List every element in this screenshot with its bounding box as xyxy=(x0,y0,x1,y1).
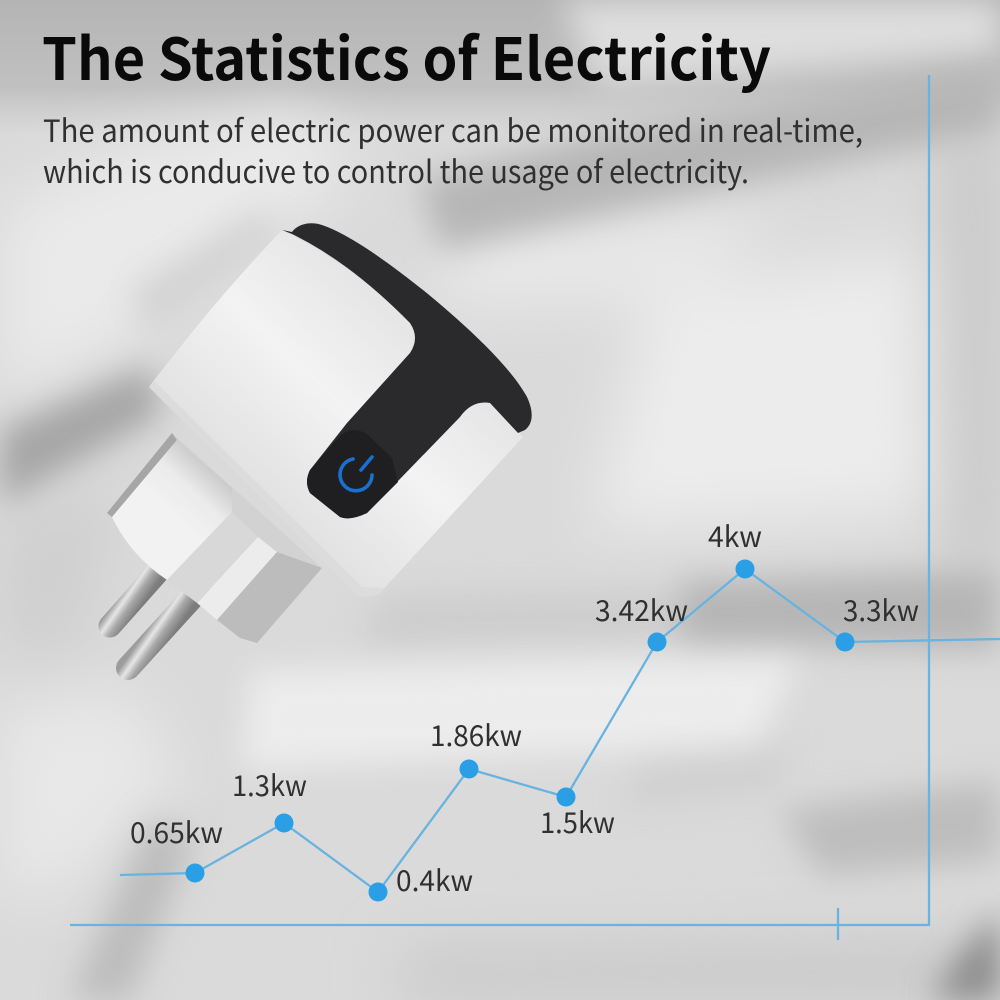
data labels: 3.42kw xyxy=(595,588,688,630)
button xyxy=(307,430,398,518)
white body xyxy=(149,230,523,597)
data points xyxy=(186,560,854,902)
smart plug product xyxy=(107,223,532,668)
icon: power symbol xyxy=(340,457,372,491)
data labels: 3.3kw xyxy=(843,588,919,630)
data labels xyxy=(130,514,919,900)
description text xyxy=(43,106,863,192)
axes xyxy=(70,75,930,940)
plug base rear xyxy=(107,433,322,643)
plug base gray side xyxy=(217,552,322,643)
pin: front xyxy=(128,591,198,668)
data labels: 1.3kw xyxy=(232,763,307,805)
plug base light stripe xyxy=(197,537,277,620)
data line xyxy=(120,569,1000,892)
description text: which is conducive to control the usage of electricity. xyxy=(43,147,749,192)
description text: The amount of electric power can be monitored in real-time, xyxy=(43,106,863,151)
data labels: 1.86kw xyxy=(430,713,522,755)
data labels: 4kw xyxy=(708,514,762,556)
plug base front face xyxy=(112,440,232,580)
pin: rear xyxy=(110,564,165,626)
plug base rim xyxy=(107,433,177,517)
black cap xyxy=(282,223,532,518)
plug base recessed panel xyxy=(167,512,258,603)
data labels: 0.65kw xyxy=(130,810,223,852)
title: The Statistics of Electricity xyxy=(42,13,771,97)
data labels: 1.5kw xyxy=(540,800,615,842)
data labels: 0.4kw xyxy=(396,858,473,900)
body lower rim xyxy=(149,382,384,597)
